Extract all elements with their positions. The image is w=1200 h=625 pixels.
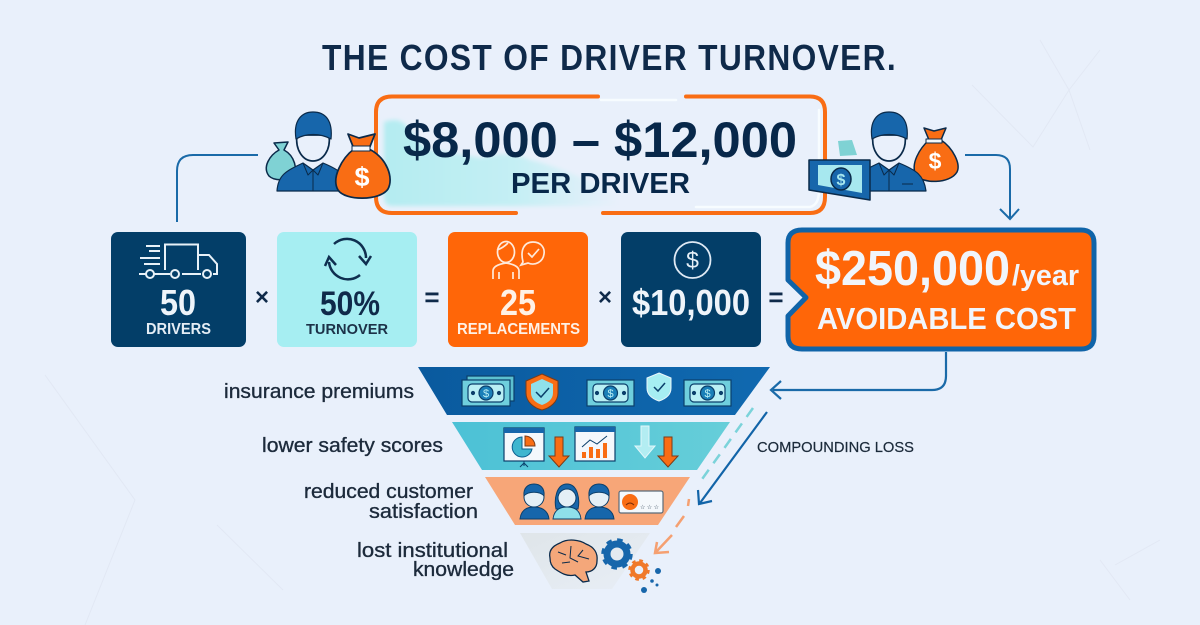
label: reduced customer satisfaction: reduced customer: [304, 480, 473, 503]
label: lost institutional knowledge: knowledge: [413, 558, 514, 581]
arrow: right connector: [965, 155, 1019, 219]
icon: light shield: [647, 373, 671, 401]
driver cap: [295, 112, 331, 139]
icon: driver with money bags: [266, 112, 390, 198]
value: 25: [500, 282, 536, 323]
driver collar: [303, 163, 323, 191]
icon: orange down arrow: [658, 437, 678, 467]
icon: stacked bills: $: [483, 388, 489, 400]
banknote: [809, 160, 870, 200]
label: REPLACEMENTS: [457, 321, 580, 338]
driver collar: [879, 163, 913, 191]
dollar sign: $: [929, 148, 942, 174]
bag tie: [352, 146, 370, 151]
driver face: [297, 135, 329, 161]
equals sign: =: [424, 282, 440, 312]
label: reduced customer satisfaction: satisfaction: [369, 500, 478, 523]
panel: cost per driver: [376, 96, 825, 213]
driver cap: [871, 112, 907, 139]
label: insurance premiums: insurance premiums: [224, 380, 414, 403]
icon: driver with cash: [809, 112, 958, 200]
icon: bill: $: [704, 388, 711, 400]
label: lower safety scores: lower safety scores: [262, 434, 443, 457]
icon: rating card: ☆☆☆: [640, 504, 659, 511]
small teal bag: [266, 142, 295, 180]
label: AVOIDABLE COST: [817, 301, 1076, 336]
per driver label: PER DRIVER: [511, 168, 690, 200]
title: THE COST OF DRIVER TURNOVER.: [322, 37, 897, 78]
icon: bill: [587, 380, 634, 406]
annual amount: $250,000: [815, 242, 1010, 296]
panel: drivers: [111, 232, 246, 347]
arrow: blue compounding: [698, 412, 767, 504]
icon: cycle arrows: [325, 239, 371, 279]
driver body: [853, 163, 926, 191]
large orange bag: [336, 134, 390, 198]
icon: bar chart slide: [575, 427, 615, 461]
value: $10,000: [632, 282, 750, 323]
per year: /year: [1012, 260, 1079, 292]
icon: dollar coin: $: [686, 247, 699, 273]
driver face: [873, 135, 905, 161]
banknote centre: [818, 165, 862, 193]
icon: bill: [684, 380, 731, 406]
panel: replacements: [448, 232, 588, 347]
icon: truck: [139, 244, 217, 278]
cost range: $8,000 – $12,000: [403, 112, 797, 168]
banknote dollar: $: [837, 172, 846, 189]
icon: light down arrow: [635, 426, 655, 458]
label: compounding loss: COMPOUNDING LOSS: [757, 439, 914, 456]
label: DRIVERS: [146, 321, 211, 338]
icon: brain: [550, 540, 597, 582]
icon: customer: [553, 484, 581, 519]
funnel tier: insurance premiums: [418, 367, 770, 415]
panel: turnover: [277, 232, 417, 347]
multiply sign: ×: [598, 284, 612, 311]
icon: bill: $: [607, 388, 614, 400]
panel: cost per replacement: [621, 232, 761, 347]
bag tie: [926, 139, 942, 143]
icon: rating card: [619, 491, 663, 513]
orange frame right: [603, 96, 825, 213]
orange bag: [914, 128, 958, 181]
icon: orange shield: [526, 374, 558, 410]
icon: customer: [585, 484, 614, 519]
arrow: teal dashed: [700, 408, 753, 482]
arrow: cost into funnel: [771, 352, 946, 399]
label: lost institutional knowledge: [357, 539, 514, 581]
multiply sign: ×: [255, 284, 269, 311]
inner white highlight: [601, 100, 819, 207]
icon: blue gear: [603, 540, 631, 568]
icon: replacement person: [493, 242, 544, 279]
icon: pie chart slide: [504, 428, 544, 467]
equals sign: =: [768, 282, 784, 312]
label: lost institutional knowledge: lost institutional: [357, 539, 508, 562]
driver body: [277, 163, 349, 191]
arrow: orange dashed: [655, 499, 689, 553]
value: 50: [160, 282, 196, 323]
teal wash behind figure: [384, 120, 620, 206]
label: reduced customer satisfaction: [304, 480, 478, 523]
arrow: left connector: [177, 155, 258, 222]
orange frame left: [376, 96, 598, 213]
flying note: [838, 140, 857, 156]
value: 50%: [320, 285, 380, 323]
funnel tier: reduced customer satisfaction: [485, 477, 690, 525]
funnel tier: lower safety scores: [452, 422, 730, 470]
icon: orange down arrow: [549, 437, 569, 467]
icon: gear debris: [641, 568, 661, 593]
icon: customer: [520, 484, 549, 519]
label: TURNOVER: [306, 321, 388, 338]
dollar sign: $: [354, 162, 370, 192]
icon: orange gear: [630, 560, 648, 580]
funnel tier: lost institutional knowledge: [520, 533, 661, 593]
banknote medallion: [831, 168, 851, 190]
panel: avoidable cost: [788, 230, 1094, 349]
icon: stacked bills: [462, 376, 514, 406]
